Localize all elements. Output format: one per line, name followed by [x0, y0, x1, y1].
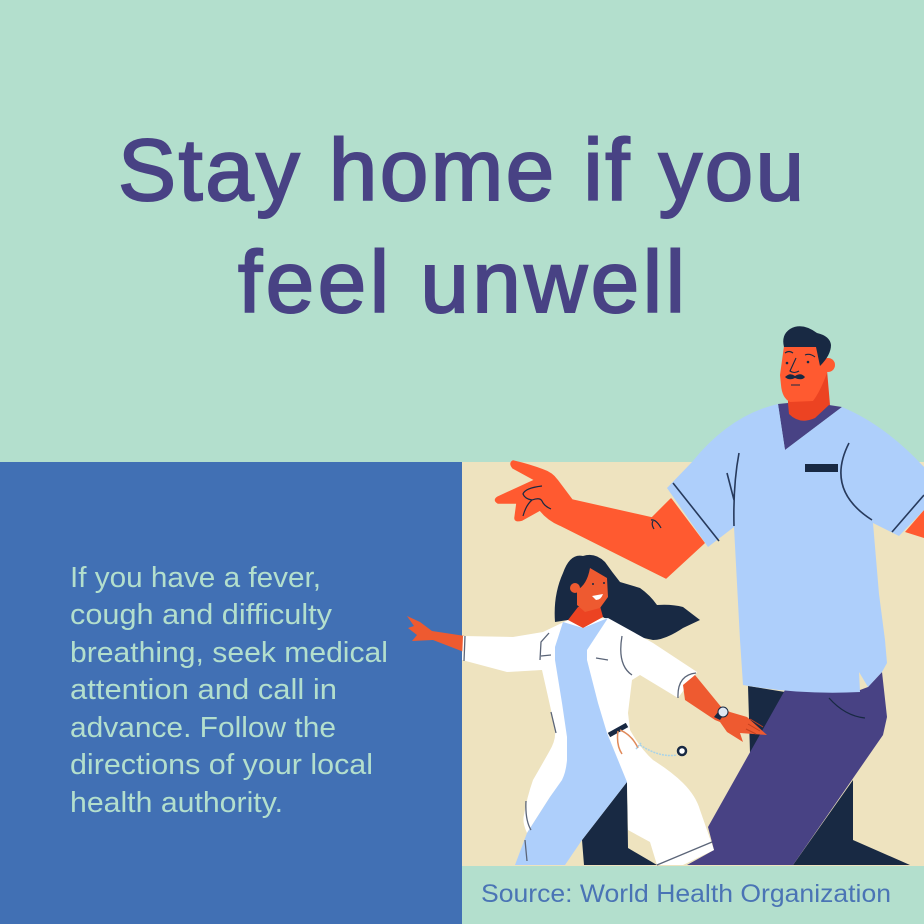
illustration: woman doctor [407, 555, 767, 865]
woman: hand lines [746, 719, 763, 734]
woman: wristwatch [714, 707, 728, 720]
body text: attention and call in [70, 674, 337, 706]
man: trouser pocket line [829, 698, 865, 718]
man: pointing arm [496, 461, 704, 578]
source line: Source: World Health Organization [481, 880, 891, 908]
title: Stay home if you [118, 122, 804, 219]
man: hand finger lines [523, 486, 661, 529]
panel: cream illustration background [462, 462, 924, 866]
woman: stethoscope [609, 725, 686, 756]
woman: ear [570, 583, 580, 593]
woman: coat seams [464, 633, 712, 865]
man: trousers [687, 672, 887, 865]
man: name badge [805, 464, 838, 472]
body text: cough and difficulty [70, 599, 333, 631]
woman: extended left hand and arm [407, 616, 465, 652]
woman: blue dress [515, 618, 627, 865]
woman: lab coat [462, 618, 714, 865]
man: scrub shirt [667, 404, 924, 693]
body text: If you have a fever, [70, 562, 321, 594]
body text: health authority. [70, 787, 283, 819]
man: ear [821, 358, 835, 372]
title: feel unwell [238, 234, 685, 331]
body text [70, 562, 388, 819]
man: right arm [905, 510, 924, 538]
body text: directions of your local [70, 749, 373, 781]
man: face [780, 343, 827, 402]
woman: face [577, 568, 608, 612]
man: v-neck undershirt [778, 403, 842, 450]
man: shirt seams [673, 443, 924, 541]
man: back leg [748, 686, 910, 865]
woman: hair [555, 555, 700, 640]
man: hair [783, 326, 831, 366]
man: facial features [785, 352, 815, 385]
woman: right forearm and hand [683, 675, 767, 742]
woman: neck [568, 606, 603, 628]
body text: breathing, seek medical [70, 637, 388, 669]
panel: blue text panel [0, 462, 462, 924]
title [118, 122, 804, 331]
illustration: man in scrubs [496, 326, 924, 865]
woman: back leg [582, 782, 657, 865]
body text: advance. Follow the [70, 712, 336, 744]
man: neck [788, 370, 830, 422]
woman: smile and eyes [592, 582, 605, 600]
